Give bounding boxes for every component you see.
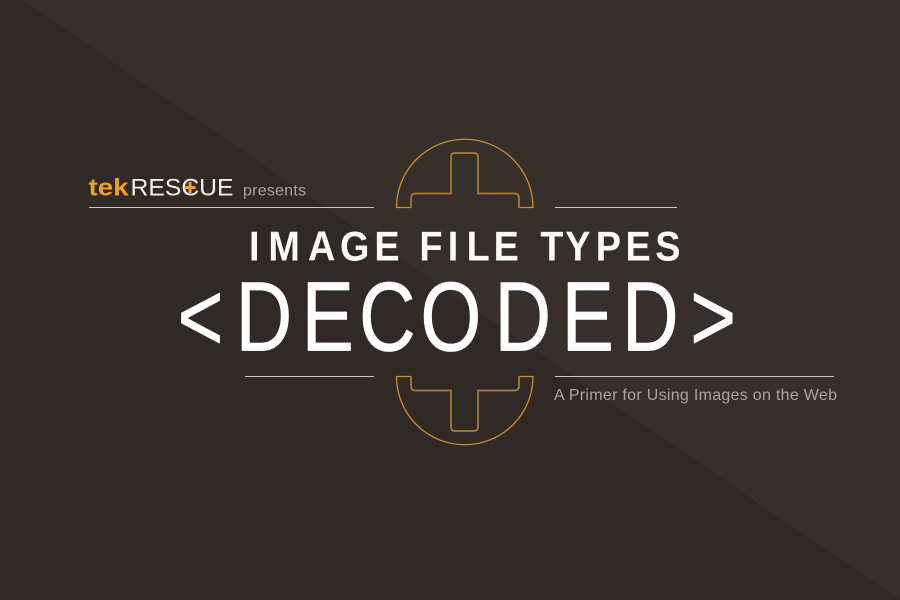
rule: top left — [89, 207, 374, 208]
logo wordmark: tek — [88, 174, 129, 202]
title: decoded: <DECODED> — [178, 262, 736, 371]
icon: top half rescue plus — [396, 139, 533, 208]
title: image file types: IMAGE FILE TYPES — [249, 224, 680, 270]
rule: bottom left — [245, 376, 374, 377]
brand line: tekRESCUE presents — [88, 174, 306, 202]
logo wordmark: RESCUE — [130, 174, 234, 202]
presents label: presents — [243, 182, 306, 200]
rule: top right — [555, 207, 677, 208]
rule: bottom right — [555, 376, 834, 377]
subtitle: A Primer for Using Images on the Web — [554, 387, 837, 404]
icon: bottom half rescue plus — [396, 376, 533, 445]
